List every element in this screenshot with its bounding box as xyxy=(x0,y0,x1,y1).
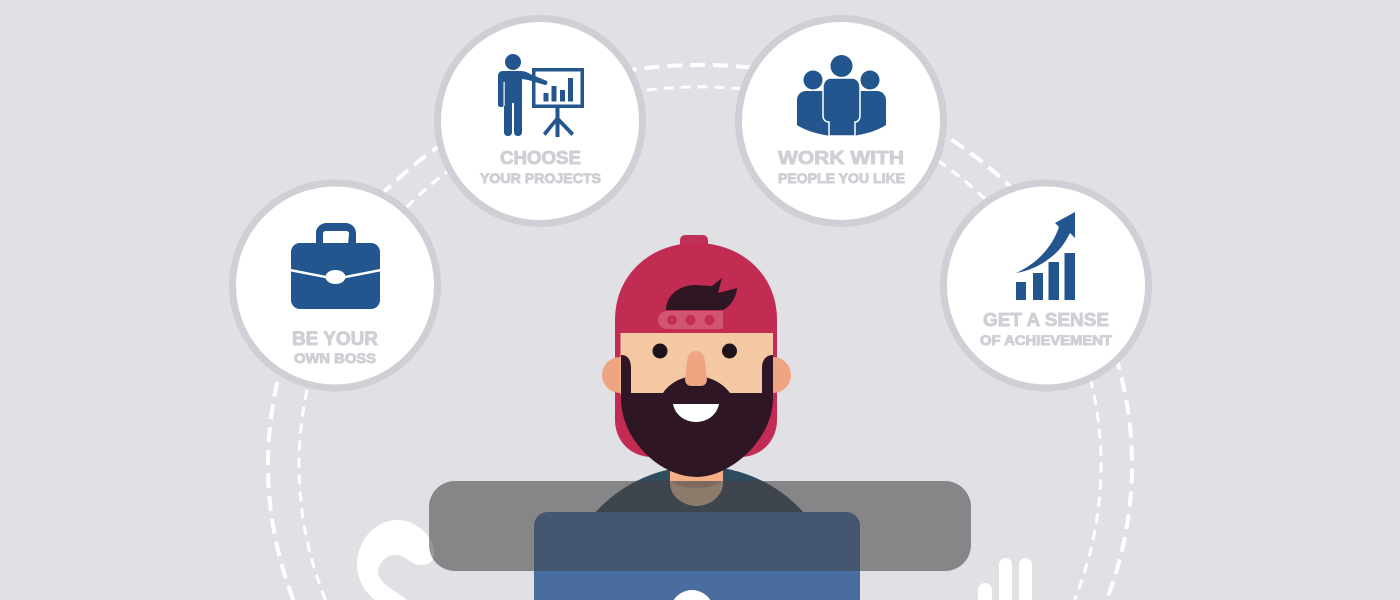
label: GET A SENSE xyxy=(983,309,1109,330)
label: YOUR PROJECTS xyxy=(480,171,601,186)
cap xyxy=(615,235,777,457)
badge: work with people you like xyxy=(738,18,944,224)
laptop xyxy=(534,512,860,600)
label xyxy=(778,147,905,186)
shirt xyxy=(596,466,803,512)
label xyxy=(292,329,378,366)
icon: briefcase xyxy=(291,223,380,309)
icon: growth chart with arrow xyxy=(1016,212,1075,300)
badge: be your own boss xyxy=(232,183,438,388)
laptop logo xyxy=(674,590,710,600)
label: OF ACHIEVEMENT xyxy=(980,333,1113,348)
label xyxy=(980,309,1113,348)
label xyxy=(480,147,601,186)
beard xyxy=(621,355,773,477)
face xyxy=(620,333,773,395)
nose xyxy=(685,351,707,386)
eyes xyxy=(652,344,737,358)
label: CHOOSE xyxy=(500,147,581,168)
badge: choose your projects xyxy=(438,18,642,224)
inner dashed ring xyxy=(299,87,1101,600)
label: WORK WITH xyxy=(778,147,904,168)
cap strap xyxy=(658,311,723,329)
label: PEOPLE YOU LIKE xyxy=(778,171,905,186)
mouth xyxy=(673,404,719,422)
outer dashed ring xyxy=(268,65,1132,600)
white chart bars background xyxy=(978,558,1032,600)
character xyxy=(596,235,803,512)
label: BE YOUR xyxy=(292,329,378,350)
badge: get a sense of achievement xyxy=(944,183,1148,388)
icon: group of people xyxy=(797,55,886,136)
ears xyxy=(602,357,791,393)
neck xyxy=(670,470,723,506)
hair through cap opening xyxy=(666,278,737,310)
icon: presenter with chart xyxy=(498,54,584,137)
white letter S background xyxy=(357,520,434,600)
label: OWN BOSS xyxy=(294,351,376,366)
translucent grey bar xyxy=(429,481,971,571)
